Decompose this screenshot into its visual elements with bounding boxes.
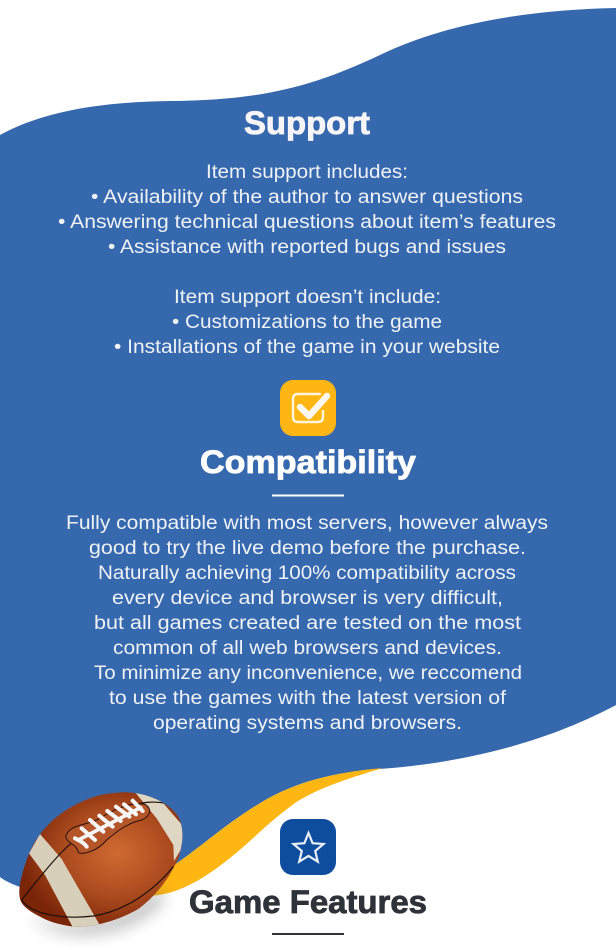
yellow swoosh xyxy=(110,768,383,896)
text block: item support exclusions: • Installations of the game in your website xyxy=(114,337,500,358)
text block: item support includes: • Answering technical questions about item’s features xyxy=(58,212,556,233)
text block: item support exclusions: • Customizations to the game xyxy=(172,312,442,333)
text block: compatibility description: to use the games with the latest version of xyxy=(109,688,507,709)
text block: item support exclusions xyxy=(114,287,500,358)
text block: compatibility description: common of all web browsers and devices. xyxy=(113,638,502,659)
text block: compatibility description: every device and browser is very difficult, xyxy=(112,588,503,609)
heading: Compatibility: Compatibility xyxy=(200,444,416,480)
heading: Game Features: Game Features xyxy=(189,884,427,920)
text block: item support includes: • Availability of the author to answer questions xyxy=(91,187,523,208)
text block: compatibility description: To minimize any inconvenience, we reccomend xyxy=(94,663,522,684)
text block: item support includes xyxy=(58,162,556,258)
text block: compatibility description: but all games created are tested on the most xyxy=(94,613,522,634)
text block: item support includes: • Assistance with reported bugs and issues xyxy=(108,237,506,258)
text block: item support exclusions: Item support doesn’t include: xyxy=(174,287,441,308)
text block: compatibility description: Fully compatible with most servers, however always xyxy=(66,513,548,534)
text block: compatibility description xyxy=(66,513,548,734)
text block: compatibility description: Naturally achieving 100% compatibility across xyxy=(98,563,516,584)
icon: yellow checkbox xyxy=(280,380,336,436)
text block: item support includes: Item support includes: xyxy=(206,162,408,183)
heading: Support: Support xyxy=(244,105,370,141)
icon: football xyxy=(19,791,185,935)
text block: compatibility description: good to try the live demo before the purchase. xyxy=(89,538,526,559)
text block: compatibility description: operating systems and browsers. xyxy=(153,713,462,734)
icon: blue star xyxy=(280,819,336,875)
